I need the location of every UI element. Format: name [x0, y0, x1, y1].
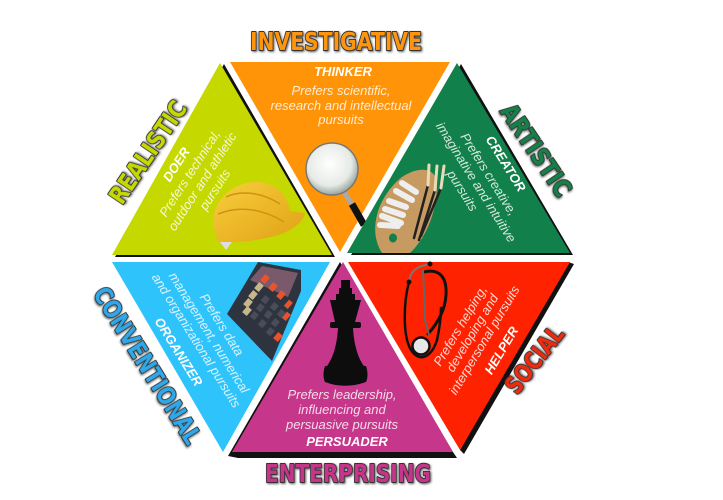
heading: conventional: CONVENTIONAL [87, 281, 207, 450]
text: creator: imaginative and intuitive [433, 119, 519, 245]
heading: social: SOCIAL [499, 320, 570, 399]
text: thinker: THINKER [314, 64, 372, 79]
text: creator [419, 101, 549, 253]
text: doer: pursuits [196, 166, 234, 214]
text: organizer: and organizational pursuits [149, 271, 244, 411]
text: persuader [285, 387, 398, 449]
text: helper: developing and [443, 291, 502, 375]
heading: investigative: INVESTIGATIVE [250, 27, 422, 56]
heading: realistic: REALISTIC [103, 95, 193, 209]
panel: social [348, 262, 574, 454]
text: doer: Prefers technical, [156, 127, 223, 219]
icon: calculator [227, 262, 301, 361]
text: thinker: Prefers scientific, [292, 83, 390, 98]
icon: hard hat [213, 182, 305, 250]
icon: stethoscope [405, 262, 446, 357]
icon: chess king [324, 280, 368, 386]
text: creator: Prefers creative, [457, 130, 520, 218]
text: doer [139, 112, 252, 242]
heading: artistic: ARTISTIC [494, 98, 578, 202]
text: organizer: ORGANIZER [152, 315, 206, 389]
text: helper: interpersonal pursuits [446, 283, 523, 397]
text: helper: HELPER [481, 323, 522, 377]
panel: realistic [112, 63, 335, 257]
panel: artistic [347, 63, 573, 255]
text: organizer: management, numerical [166, 269, 253, 397]
text: organizer [131, 255, 270, 422]
panel: investigative [230, 62, 450, 252]
text: persuader: persuasive pursuits [285, 417, 398, 432]
text: persuader: influencing and [298, 402, 386, 417]
text: doer: DOER [160, 144, 193, 184]
text: creator: pursuits [444, 167, 481, 214]
text: thinker: pursuits [317, 112, 364, 127]
heading: enterprising: ENTERPRISING [265, 459, 431, 488]
icon: paint palette [375, 165, 444, 253]
text: organizer: Prefers data [197, 291, 247, 359]
panel: conventional [112, 255, 330, 452]
text: helper [422, 268, 540, 408]
text: doer: outdoor and athletic [165, 129, 240, 233]
panel: enterprising [228, 262, 457, 458]
text: persuader: PERSUADER [306, 434, 388, 449]
text: thinker [271, 64, 413, 127]
text: helper: Prefers helping, [430, 283, 490, 369]
icon: magnifying glass [306, 143, 364, 225]
text: thinker: research and intellectual [271, 98, 413, 113]
text: persuader: Prefers leadership, [287, 387, 397, 402]
text: creator: CREATOR [483, 133, 529, 195]
